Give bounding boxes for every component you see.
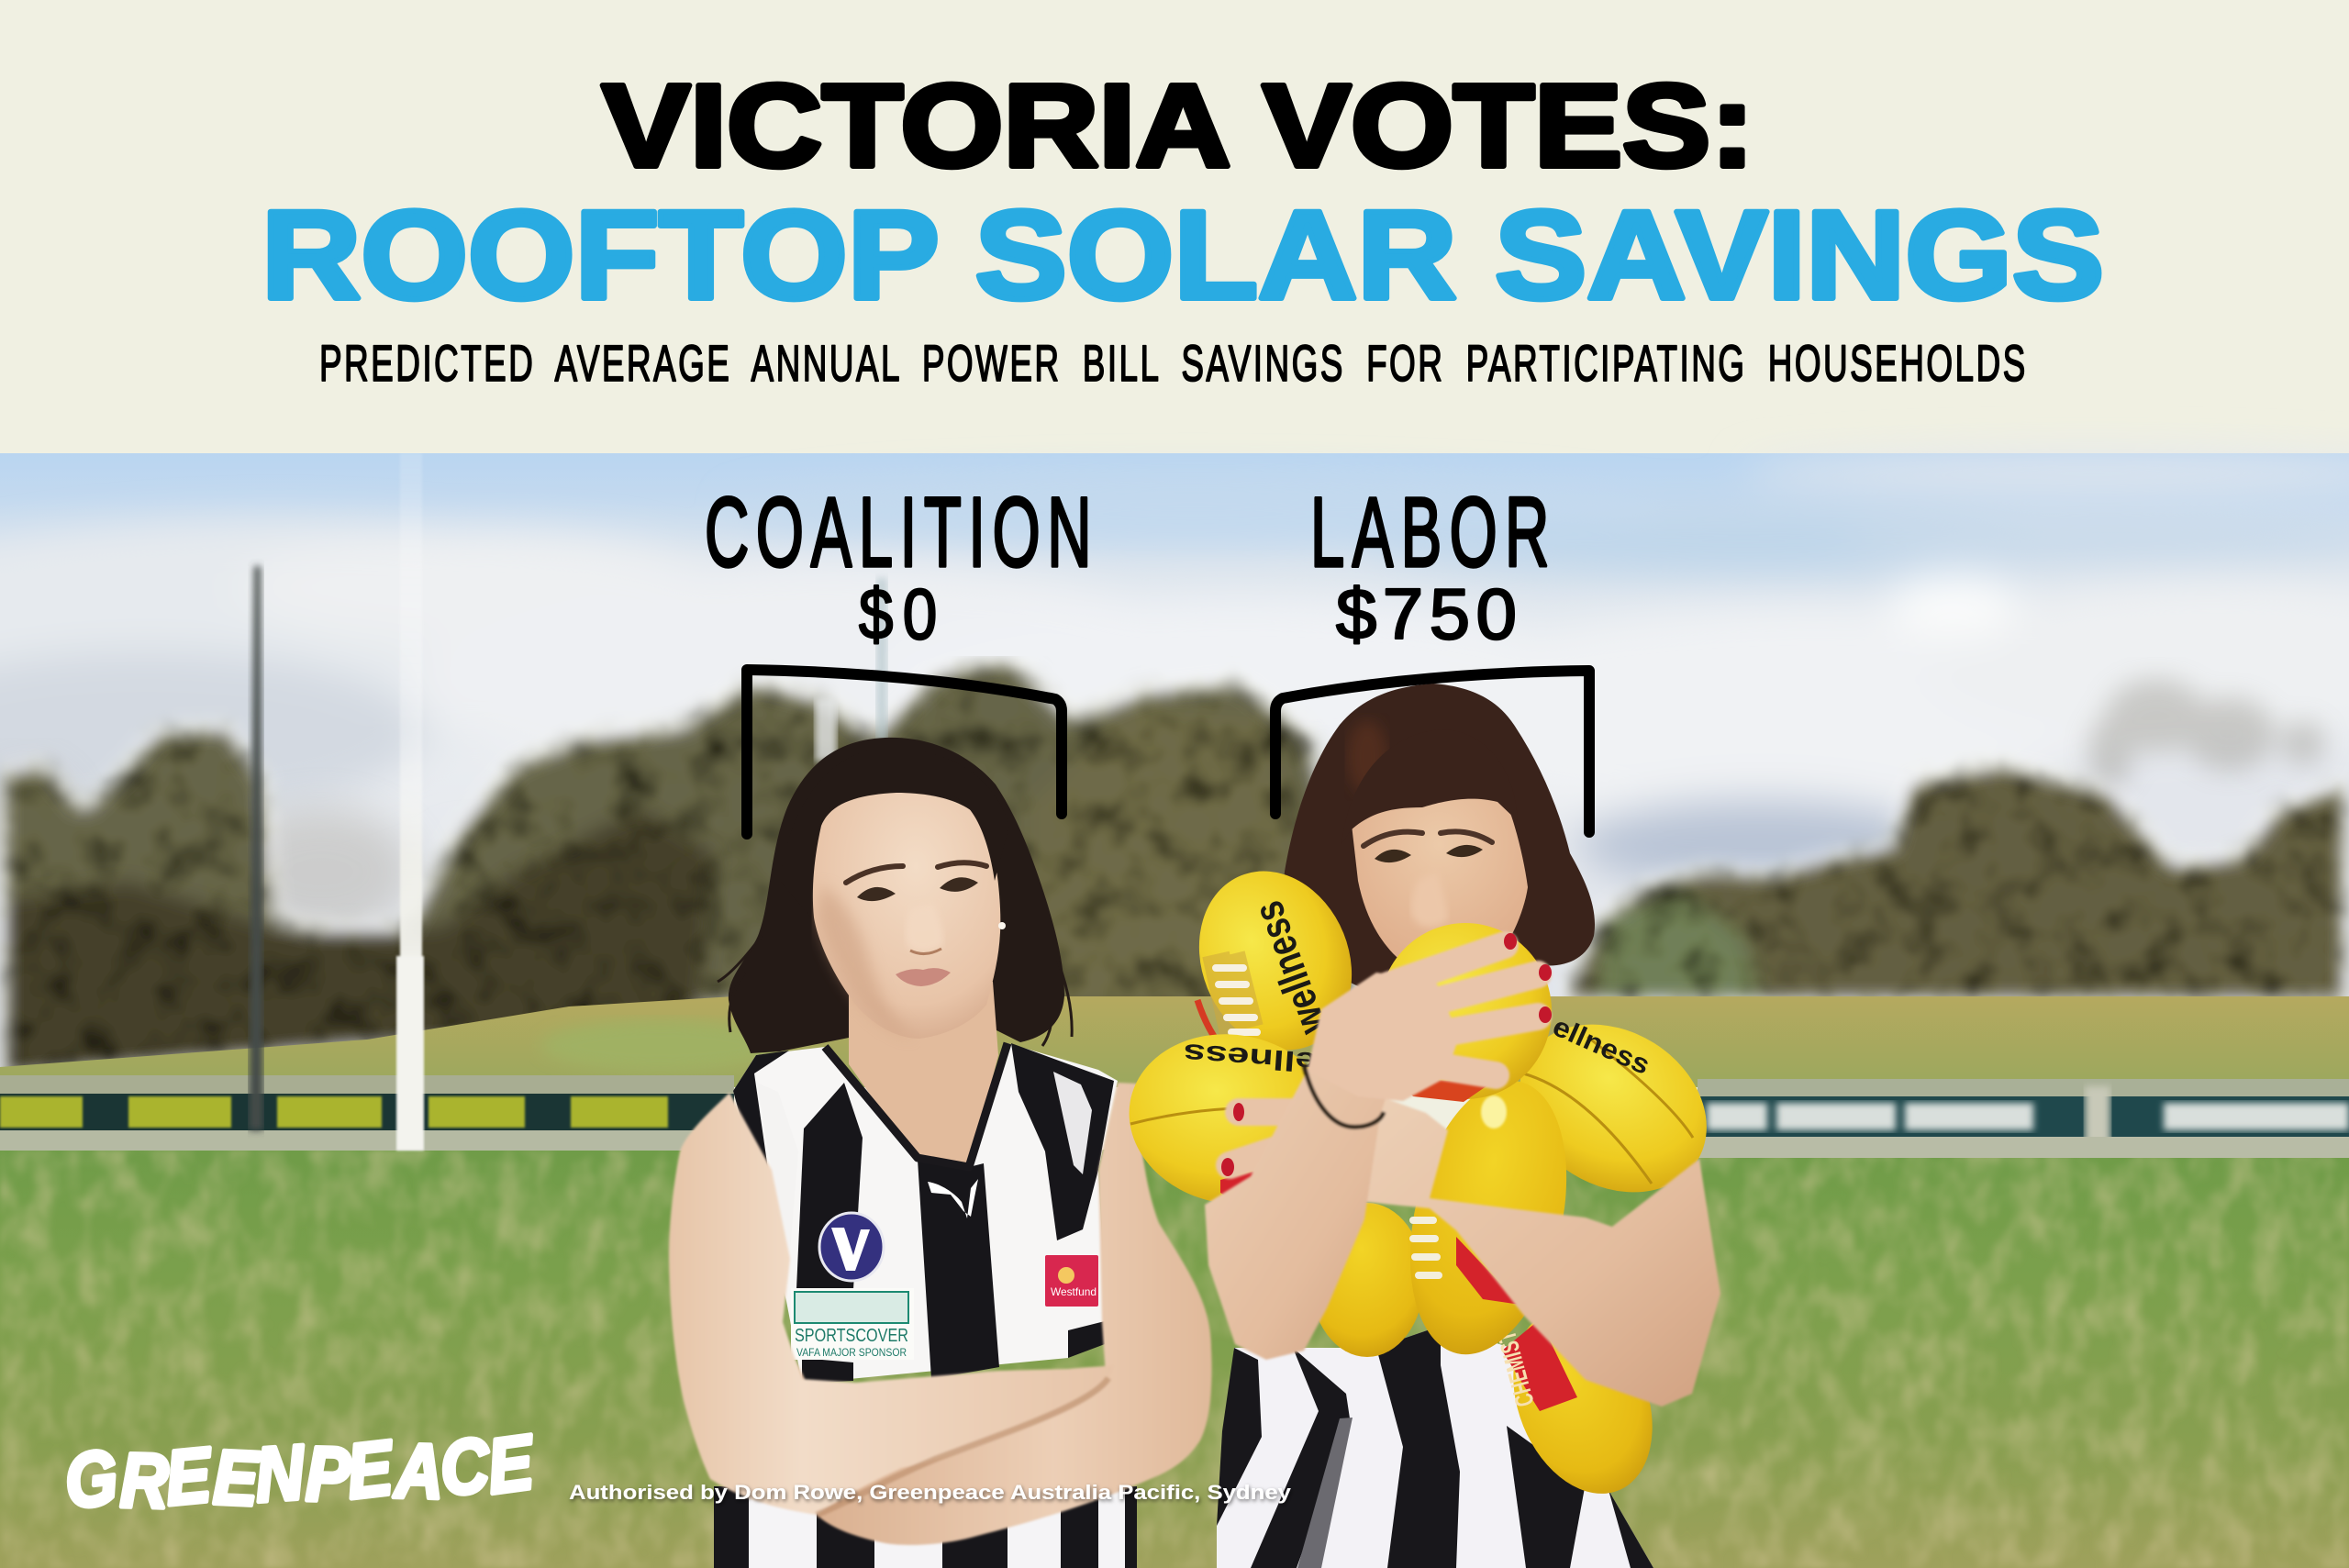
subtitle: PREDICTED AVERAGE ANNUAL POWER BILL SAVINGS FOR PARTICIPATING HOUSEHOLDS xyxy=(319,335,2025,393)
white right shoulder stripe xyxy=(1053,1072,1092,1174)
hair back xyxy=(1284,684,1595,1009)
football: right xyxy=(1488,991,1738,1226)
header panel xyxy=(0,0,2349,453)
eyebrows xyxy=(1364,831,1492,846)
jersey black stripes xyxy=(733,1043,1114,1384)
jersey xyxy=(733,1043,1118,1384)
face shadow xyxy=(817,885,916,1037)
earring xyxy=(998,922,1006,929)
sky xyxy=(0,453,2349,1077)
hair highlight xyxy=(1347,720,1387,794)
patch: sponsor xyxy=(1045,1255,1098,1307)
label xyxy=(1395,1077,1490,1102)
lower jersey xyxy=(1217,1326,1653,1568)
fingers under forearm xyxy=(1230,1112,1303,1165)
label text: CHEMIST xyxy=(1492,1328,1540,1409)
football: held in hand xyxy=(1379,923,1552,1102)
dark light pole xyxy=(249,566,263,1130)
nose shadow xyxy=(910,949,941,954)
red rim xyxy=(1197,1000,1230,1055)
grass bank xyxy=(0,996,2349,1087)
patch: sponsor: Westfund xyxy=(1051,1285,1097,1298)
eyes xyxy=(1375,845,1483,862)
oval grass xyxy=(0,1150,2349,1568)
fingers xyxy=(1386,945,1538,1075)
face xyxy=(1341,729,1528,978)
bracket: Labor xyxy=(1275,671,1589,832)
crossed arms xyxy=(669,1083,1211,1545)
hazy bare trees left xyxy=(0,771,413,936)
person: woman with crossed arms xyxy=(669,738,1211,1568)
eyebrows xyxy=(846,862,986,883)
neck xyxy=(849,982,998,1171)
laces panel xyxy=(1216,954,1250,1037)
background trees xyxy=(0,656,2349,1083)
bracket: Coalition xyxy=(747,670,1062,834)
label xyxy=(1456,1237,1520,1305)
fringe xyxy=(1341,729,1518,844)
patch: Sportscover: VAFA MAJOR SPONSOR xyxy=(796,1346,907,1359)
face xyxy=(780,748,1009,1039)
value: Labor $750: $750 xyxy=(1336,574,1517,654)
nail polish xyxy=(1221,933,1552,1176)
arms and hands xyxy=(1205,945,1720,1407)
fence right xyxy=(1698,1079,2349,1158)
grass patch on bank xyxy=(541,1020,780,1072)
jersey base xyxy=(733,1043,1118,1384)
lips xyxy=(896,968,951,986)
patch: Sportscover xyxy=(791,1288,914,1360)
logo: Greenpeace: GREENPEACE xyxy=(61,1418,540,1529)
authorisation line: Authorised by Dom Rowe, Greenpeace Australia Pacific, Sydney xyxy=(569,1481,1292,1504)
nose xyxy=(1411,872,1448,927)
football: lower left xyxy=(1310,1203,1424,1357)
left arm and upper forearm xyxy=(669,1093,1114,1515)
value: Coalition $0: $0 xyxy=(859,574,937,654)
lower jersey xyxy=(714,1486,1137,1568)
goal post xyxy=(396,453,424,1151)
football: lower right xyxy=(1487,1289,1678,1515)
label: Labor: LABOR xyxy=(1310,478,1549,588)
distant white post xyxy=(815,697,837,762)
back arm xyxy=(1205,1045,1403,1360)
title: Rooftop Solar Savings: ROOFTOP SOLAR SAVINGS xyxy=(262,185,2104,326)
highlight xyxy=(1481,1095,1507,1129)
forward arm xyxy=(1364,1091,1720,1407)
logo: puma xyxy=(928,1179,978,1218)
palm xyxy=(1308,973,1459,1101)
logo: V badge xyxy=(819,1213,884,1281)
right arm and lower forearm xyxy=(817,1083,1211,1545)
football: centre vertical xyxy=(1386,1065,1591,1370)
distant goal post behind coalition bracket xyxy=(876,578,887,743)
person: woman hugging footballs xyxy=(1116,684,1738,1568)
title: Victoria Votes: VICTORIA VOTES: xyxy=(602,61,1754,192)
fence left xyxy=(0,1075,734,1151)
laces xyxy=(1413,1220,1439,1275)
lace stitches xyxy=(1216,968,1257,1032)
photo background: sports oval xyxy=(0,453,2349,1568)
label xyxy=(1502,1319,1577,1411)
football: left horizontal xyxy=(1116,1018,1349,1220)
eyes xyxy=(857,877,978,901)
collar xyxy=(825,1043,1008,1167)
hair back xyxy=(729,738,1064,1053)
hair fringe side xyxy=(780,748,1009,917)
brand: ellness xyxy=(1548,1011,1654,1081)
label xyxy=(1220,1170,1258,1207)
brand: ellness xyxy=(1183,1038,1318,1077)
white shoulder stripe xyxy=(757,1083,798,1284)
nose xyxy=(906,904,943,951)
forearm crease xyxy=(817,1378,1108,1515)
grass texture xyxy=(0,1150,2349,1568)
hidden hand xyxy=(769,1321,806,1385)
label: Coalition: COALITION xyxy=(705,478,1092,588)
hair tie bracelet xyxy=(1304,1064,1384,1127)
bare branches on the right xyxy=(2088,679,2325,789)
patch: Sportscover: SPORTSCOVER xyxy=(795,1326,908,1346)
clouds xyxy=(0,454,2349,890)
stray hair strands xyxy=(718,936,1072,1046)
brand: wellness xyxy=(1243,895,1336,1041)
football: wellness top left xyxy=(1173,848,1378,1073)
